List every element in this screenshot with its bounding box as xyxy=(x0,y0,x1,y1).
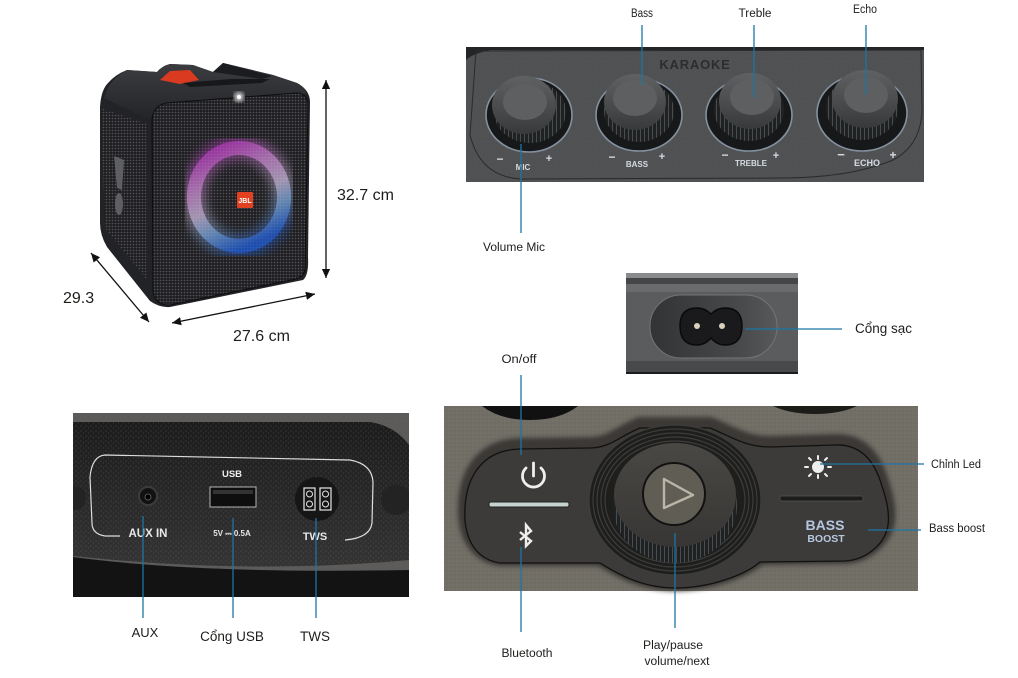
top light xyxy=(234,92,244,102)
knob labels: − xyxy=(721,148,729,162)
figure-8 socket xyxy=(680,308,742,345)
callout: Bass xyxy=(631,8,653,85)
knob: mic xyxy=(486,76,572,152)
dial knob xyxy=(613,443,737,563)
karaoke label: KARAOKE xyxy=(659,57,731,72)
knob labels xyxy=(496,147,897,172)
panel: top controls xyxy=(444,406,918,591)
panel: karaoke knobs xyxy=(466,47,924,182)
knob: bass xyxy=(596,74,682,151)
JBL logo xyxy=(237,192,253,208)
speaker body xyxy=(100,63,310,307)
knob labels: MIC xyxy=(516,163,531,172)
knob labels: + xyxy=(773,150,779,162)
callout: Cổng USB: Cổng USB xyxy=(200,629,264,644)
callout: Bluetooth: Bluetooth xyxy=(502,648,552,660)
callout: On/off: On/off xyxy=(502,354,537,366)
knob labels: ECHO xyxy=(854,158,880,168)
port recess xyxy=(650,295,777,358)
callout: TWS: TWS xyxy=(300,629,330,644)
port: USB: USB xyxy=(222,469,242,480)
knob labels: + xyxy=(659,151,665,163)
knob: echo xyxy=(817,70,907,151)
front grille xyxy=(152,93,308,305)
callout: Volume Mic: Volume Mic xyxy=(483,242,545,254)
JBL logo: JBL xyxy=(238,198,252,205)
knob labels: + xyxy=(889,148,897,162)
callout: Bass boost: Bass boost xyxy=(929,523,986,535)
top cutouts xyxy=(482,406,578,420)
bass boost label xyxy=(806,517,845,545)
side buttons xyxy=(381,485,411,515)
callout: Play/pause volume/next xyxy=(643,533,710,668)
callout: Bass: Bass xyxy=(631,8,653,20)
top handle xyxy=(160,70,199,84)
callout: Cổng sạc: Cổng sạc xyxy=(855,321,912,336)
dimension arrow: width xyxy=(172,294,315,323)
callout: TWS xyxy=(300,518,330,644)
power icon xyxy=(522,463,544,487)
knob labels: − xyxy=(837,147,845,162)
LED ring xyxy=(194,148,284,246)
play icon xyxy=(664,479,693,508)
status bar right xyxy=(780,496,863,501)
port: USB: 5V ⎓ 0.5A xyxy=(213,529,251,538)
dimension: width label: 27.6 cm xyxy=(233,328,290,345)
bluetooth icon xyxy=(520,525,531,546)
port: USB xyxy=(210,469,256,538)
knob labels: TREBLE xyxy=(735,159,768,168)
bass boost label: BOOST xyxy=(807,533,845,545)
callout: Bluetooth xyxy=(502,547,552,660)
callout: Echo xyxy=(853,4,877,95)
top surface xyxy=(104,63,306,120)
panel: charging port xyxy=(626,273,798,374)
knob labels: − xyxy=(608,150,616,164)
control plate xyxy=(465,428,888,588)
knob labels: + xyxy=(546,153,552,165)
callout: Play/pause volume/next: Play/pause xyxy=(643,640,703,652)
shadow of recessed plate xyxy=(465,424,888,584)
callout: Volume Mic xyxy=(483,144,545,254)
dimension arrow: height xyxy=(325,80,327,278)
callout: Echo: Echo xyxy=(853,4,877,16)
speaker product image xyxy=(100,63,310,307)
sun icon xyxy=(805,456,831,478)
callout: On/off xyxy=(502,354,537,455)
callout: AUX xyxy=(132,516,159,640)
dimension: depth label: 29.3 xyxy=(63,290,94,307)
knob: treble xyxy=(706,73,792,151)
dimension: height label: 32.7 cm xyxy=(337,187,394,204)
callout: Chỉnh Led: Chỉnh Led xyxy=(931,459,981,471)
knob labels: BASS xyxy=(626,160,649,169)
panel: ports xyxy=(62,413,411,597)
port outline xyxy=(90,455,373,540)
port: TWS: TWS xyxy=(303,531,327,543)
callout: Play/pause volume/next: volume/next xyxy=(644,656,710,668)
dial grooves xyxy=(589,425,761,575)
callout: Cổng USB xyxy=(200,518,264,644)
port: AUX: AUX IN xyxy=(129,528,167,540)
callout: AUX: AUX xyxy=(132,625,159,640)
port: TWS xyxy=(295,477,339,543)
dimension arrow: depth xyxy=(91,253,149,322)
status bar left xyxy=(489,502,569,507)
port: AUX xyxy=(129,487,167,540)
bass boost label: BASS xyxy=(806,517,844,533)
callout: Treble xyxy=(738,8,772,97)
callout: Treble: Treble xyxy=(738,8,772,20)
callout: Bass boost xyxy=(868,523,986,535)
knob labels: − xyxy=(496,152,504,166)
side grille xyxy=(101,108,147,280)
